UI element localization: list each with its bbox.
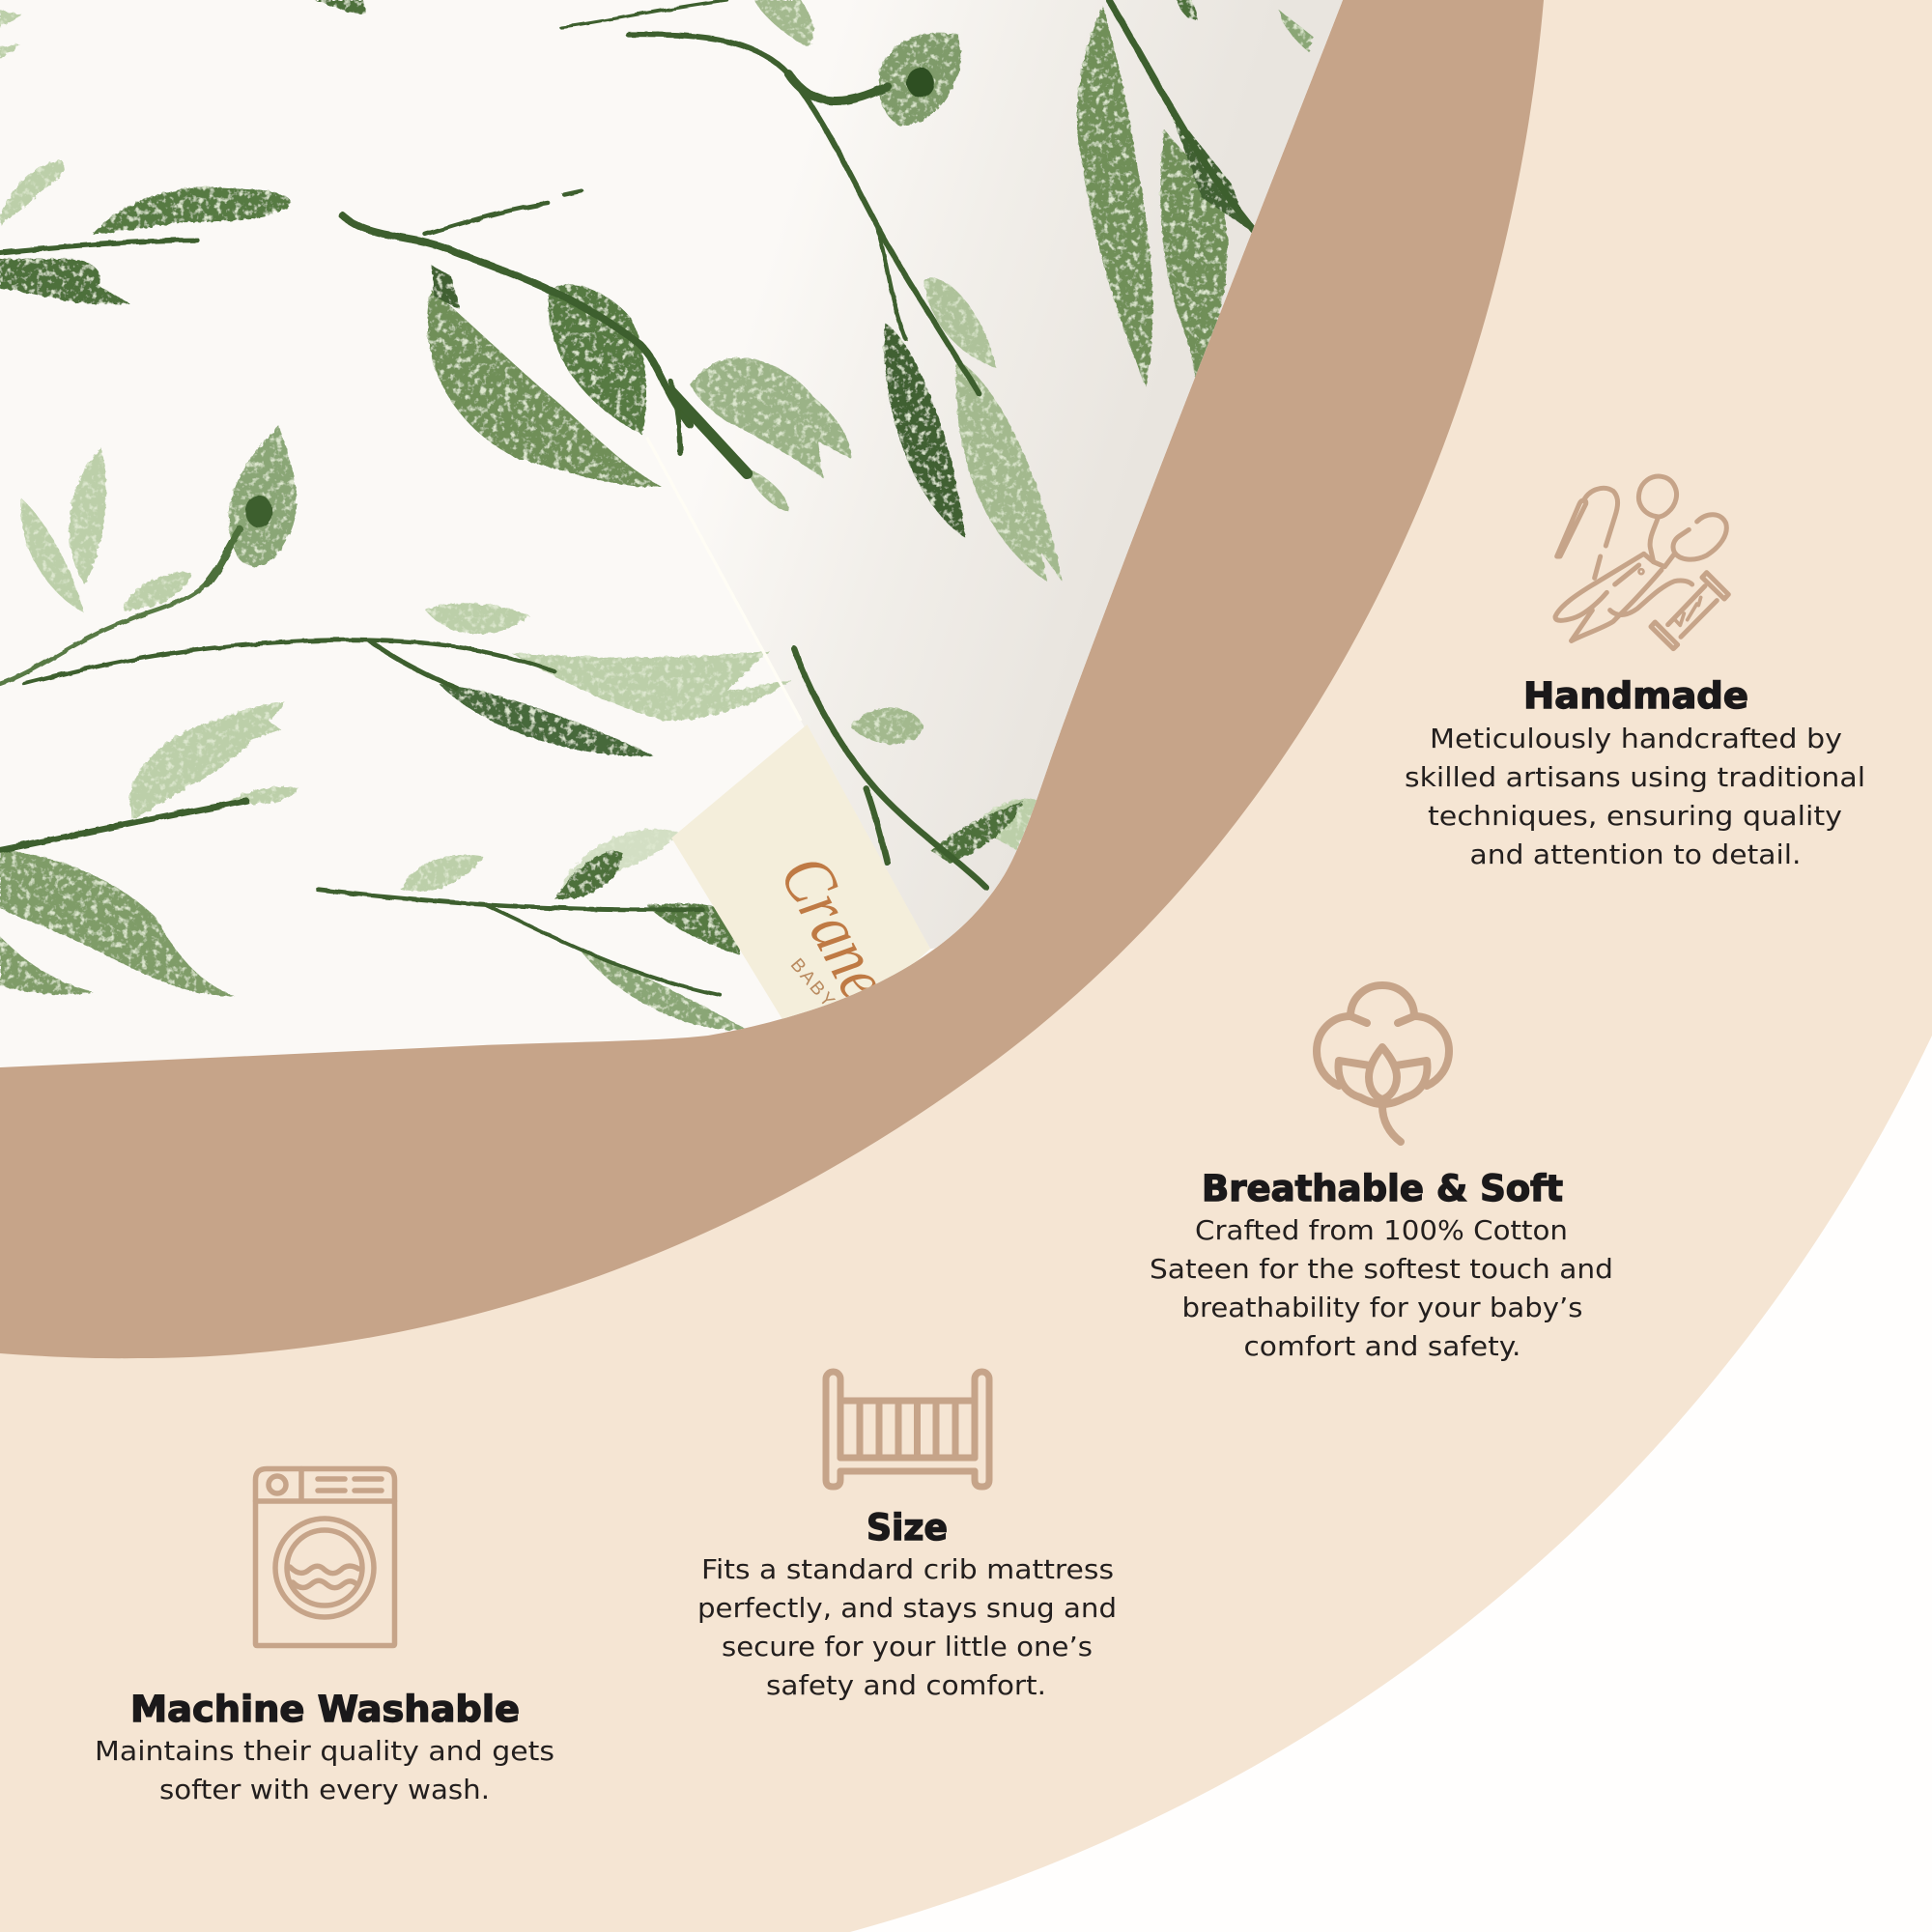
feature: Machine Washable	[95, 1468, 554, 1805]
photo: botanical crib sheet corner	[0, 0, 1355, 1072]
text block: Machine Washable description: Maintains their quality and gets	[95, 1736, 554, 1767]
feature: Handmade	[1405, 476, 1865, 870]
text block: Size description: perfectly, and stays snug and	[697, 1593, 1117, 1624]
icon: needle, scissors and thread spool	[1555, 476, 1728, 649]
sheet side face	[775, 0, 1343, 949]
leaves: pale sage	[0, 0, 1062, 892]
text block: Handmade description: techniques, ensuring quality	[1428, 801, 1842, 832]
sewn brand label	[671, 724, 930, 1019]
heading: Machine Washable: Machine Washable	[130, 1689, 520, 1730]
icon: cotton boll	[1317, 985, 1449, 1142]
heading: Breathable & Soft: Breathable & Soft	[1202, 1168, 1563, 1209]
tan band	[0, 0, 1544, 1358]
heading: Handmade: Handmade	[1523, 675, 1748, 717]
text block: Handmade description	[1405, 724, 1865, 870]
text block: Machine Washable description	[95, 1736, 554, 1805]
label brand script: Crane	[764, 843, 905, 1012]
heading: Size: Size	[867, 1507, 948, 1548]
icon: washing machine	[255, 1468, 394, 1646]
text block: Size description: secure for your little one’s	[722, 1632, 1093, 1662]
sheet seam	[738, 605, 802, 721]
text block: Handmade description: Meticulously handcrafted by	[1430, 724, 1842, 754]
text block: Breathable & Soft description	[1150, 1215, 1613, 1362]
text block: Size description	[697, 1554, 1117, 1701]
icon: crib	[826, 1372, 989, 1487]
text block: Breathable & Soft description: Sateen for the softest touch and	[1150, 1254, 1613, 1285]
text block: Size description: Fits a standard crib mattress	[701, 1554, 1114, 1585]
text block: Size description: safety and comfort.	[766, 1670, 1046, 1701]
label sub brand: BABY	[786, 954, 839, 1013]
stems and flower centres	[0, 0, 1257, 996]
text block: Breathable & Soft description: comfort and safety.	[1244, 1331, 1520, 1362]
leaves: mid and dark green	[0, 0, 1314, 1030]
feature: Size	[697, 1372, 1117, 1701]
text block: Breathable & Soft description: Crafted from 100% Cotton	[1195, 1215, 1568, 1246]
text block: Machine Washable description: softer with every wash.	[159, 1775, 490, 1805]
text block: Handmade description: and attention to detail.	[1470, 839, 1801, 870]
text block: Handmade description: skilled artisans using traditional	[1405, 762, 1865, 793]
text block: Breathable & Soft description: breathability for your baby’s	[1182, 1293, 1582, 1323]
feature: Breathable & Soft	[1150, 985, 1613, 1362]
